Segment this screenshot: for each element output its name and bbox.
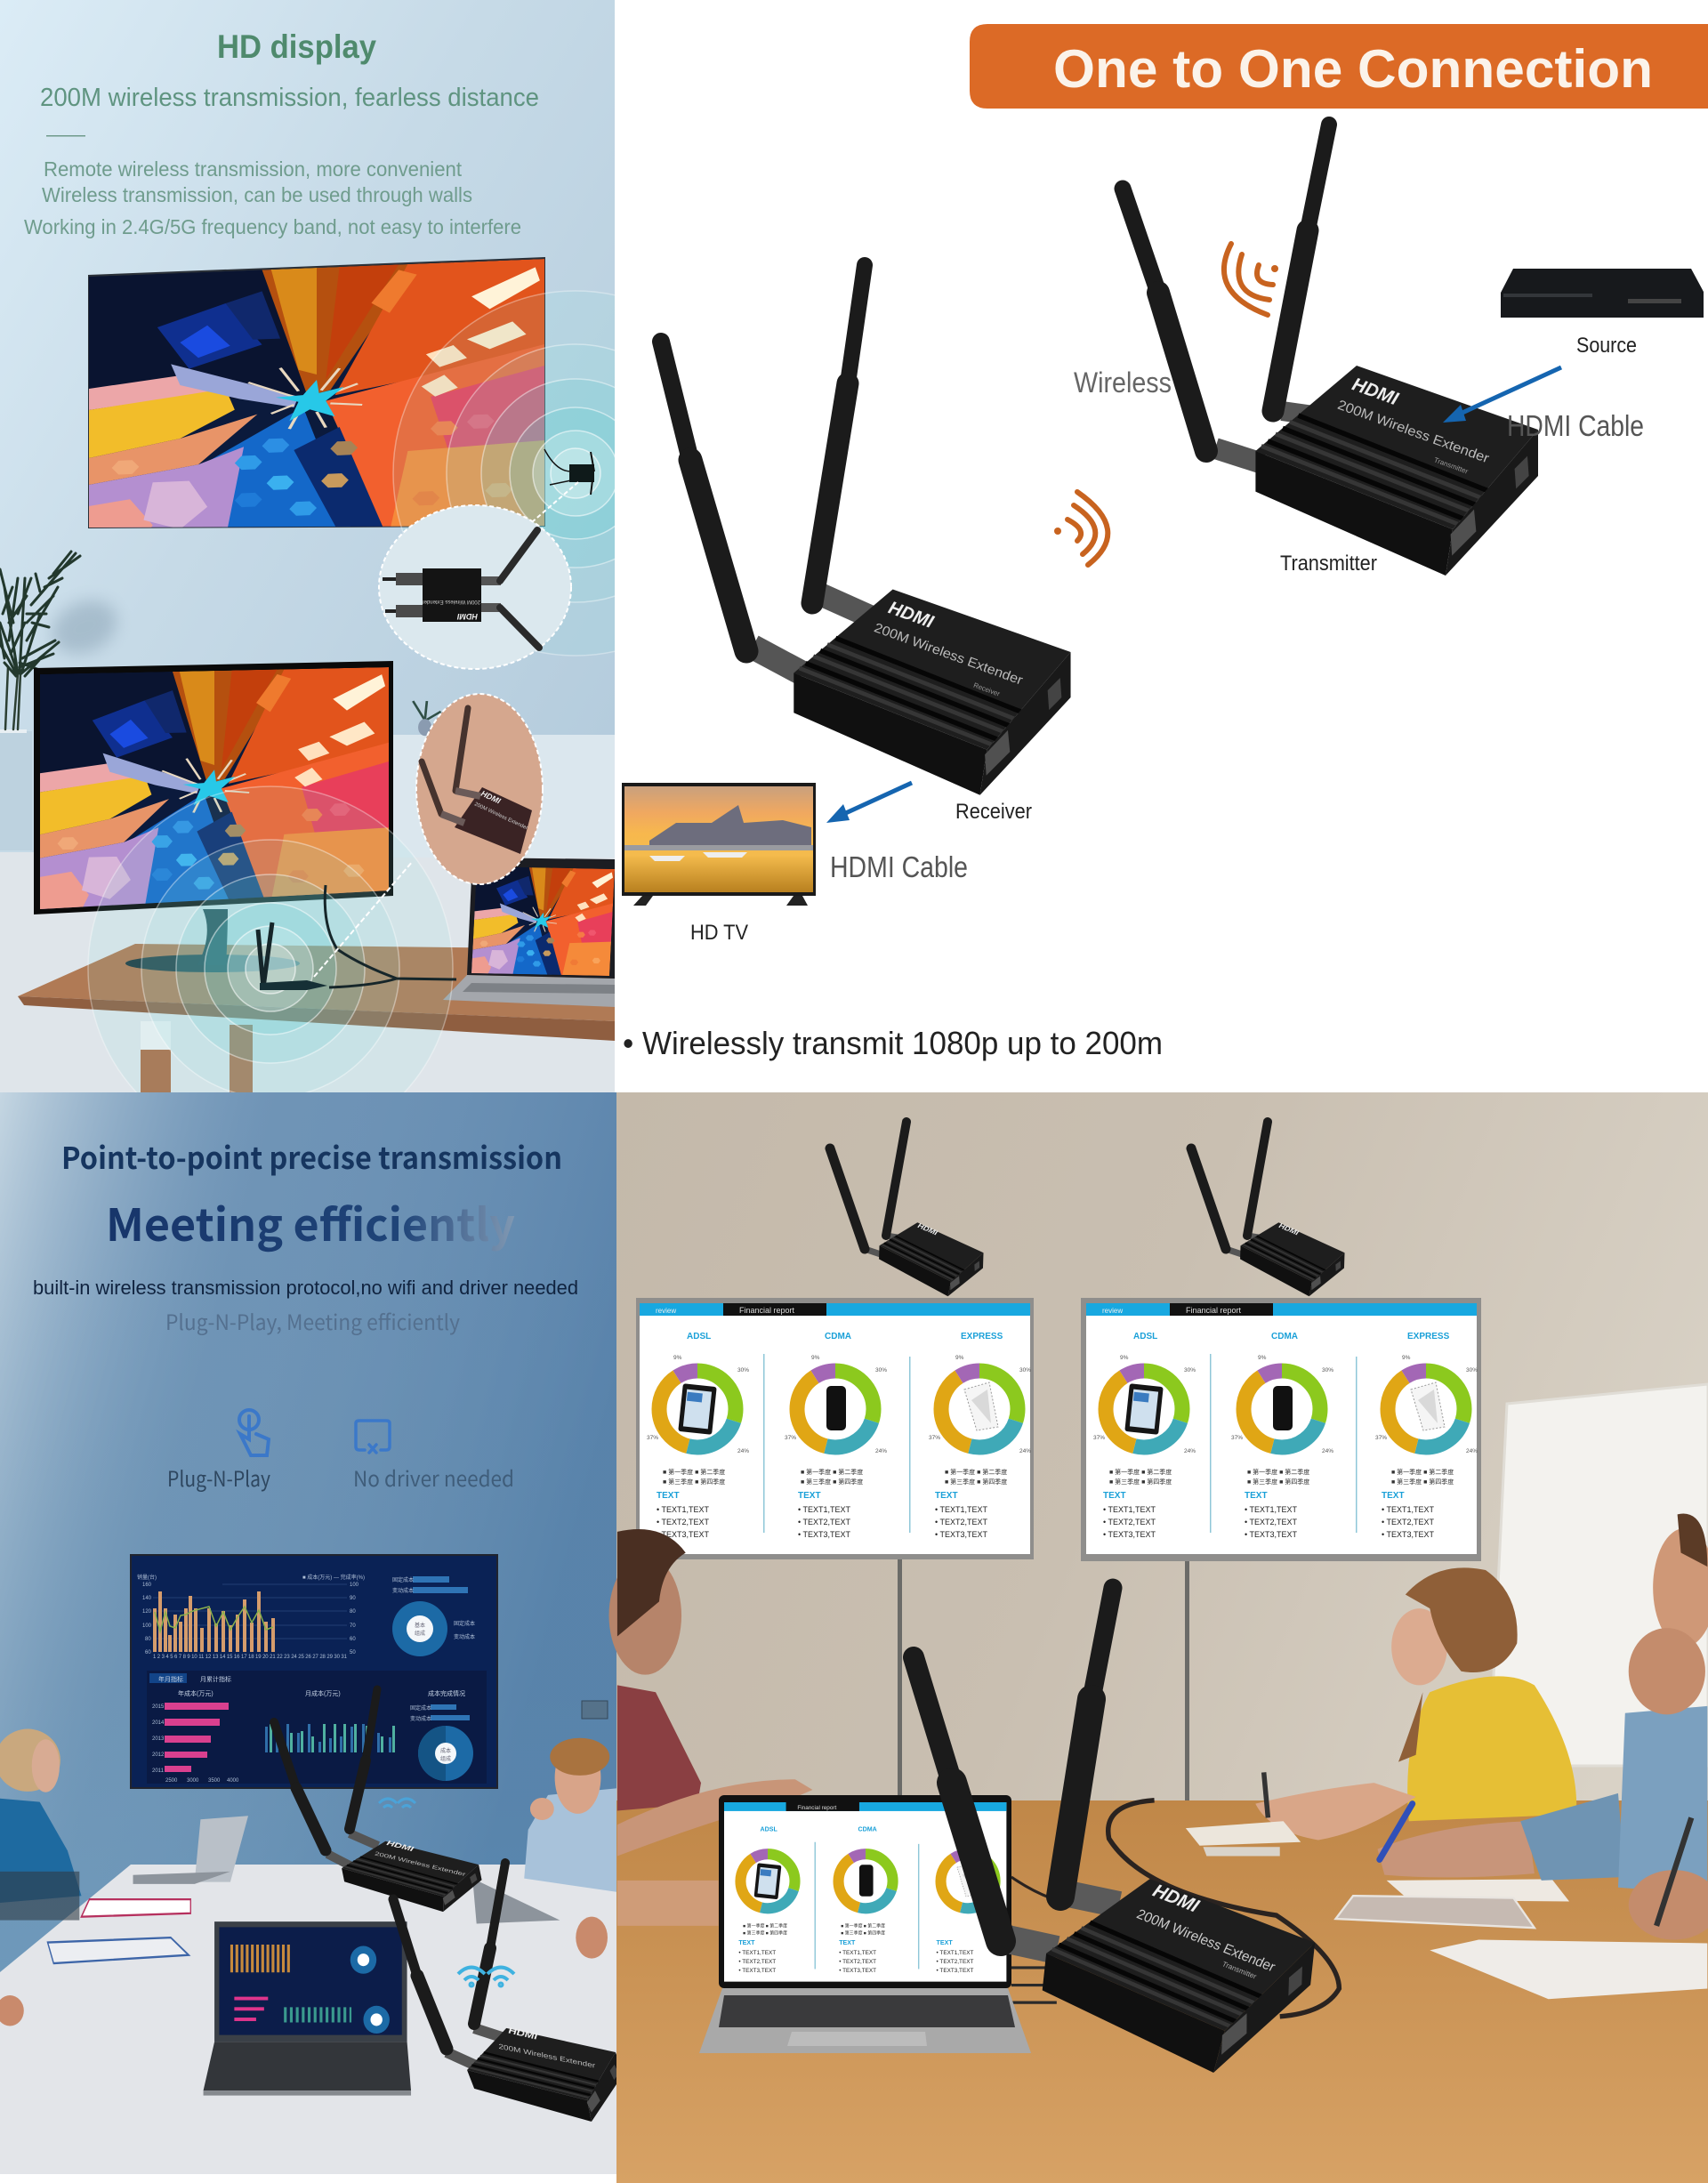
whiteboard bbox=[1489, 1384, 1708, 1766]
small transmitter and cables on table bbox=[258, 885, 456, 990]
signal rings at the desktop transmitter bbox=[87, 785, 454, 1092]
chart axis labels: 销量(台) bbox=[137, 1574, 157, 1581]
feature line 3: Working in 2.4G/5G frequency band, not easy to interfere bbox=[24, 215, 521, 238]
laptop bbox=[699, 1795, 1031, 2053]
wall monitor dashboard bbox=[131, 1555, 497, 1788]
pink bars bbox=[165, 1703, 229, 1772]
callout: receiver close-up: 200M Wireless Extender bbox=[423, 599, 480, 604]
clipboard pink bbox=[82, 1899, 190, 1917]
sub-tabs and chart titles: 月成本(万元) bbox=[305, 1689, 341, 1697]
legend bars bbox=[413, 1576, 470, 1720]
callout: transmitter close-up on wood: 200M Wireless Extender bbox=[473, 802, 528, 831]
wall monitor dashboard: 2012 bbox=[152, 1752, 165, 1758]
laptop slide: • TEXT3,TEXT bbox=[839, 1968, 876, 1974]
projected slide right: ■ 第一季度 ■ 第二季度 bbox=[1391, 1468, 1454, 1476]
projected slide left: EXPRESS bbox=[961, 1332, 1003, 1341]
transmitter device: Transmitter bbox=[1433, 455, 1470, 476]
projected slide left: ■ 第三季度 ■ 第四季度 bbox=[801, 1478, 863, 1486]
transmitter device: HDMI bbox=[1349, 374, 1402, 410]
chart axis labels: 100 bbox=[142, 1623, 152, 1629]
projected slide right: TEXT bbox=[1245, 1491, 1268, 1501]
receiver device: 200M Wireless Extender bbox=[872, 621, 1025, 689]
laptop slide: • TEXT3,TEXT bbox=[937, 1968, 973, 1974]
projected slide right: • TEXT1,TEXT bbox=[1245, 1505, 1297, 1514]
chart axis labels: 80 bbox=[350, 1609, 356, 1615]
laptop slide: ■ 第三季度 ■ 第四季度 bbox=[743, 1929, 787, 1936]
sub-tabs and chart titles: 成本完成情况 bbox=[428, 1689, 465, 1697]
chart axis labels: 80 bbox=[145, 1637, 151, 1642]
projected slide right: • TEXT1,TEXT bbox=[1382, 1505, 1434, 1514]
projected slide left: 37% bbox=[647, 1435, 658, 1441]
projected slide right: • TEXT2,TEXT bbox=[1245, 1518, 1297, 1526]
icon: small receiver on the wall bbox=[544, 449, 594, 495]
floor bbox=[0, 852, 615, 1092]
description: built-in wireless transmission protocol,no wifi and driver needed bbox=[33, 1277, 578, 1299]
icon: no driver bbox=[356, 1421, 390, 1453]
projected slide right: 24% bbox=[1322, 1448, 1333, 1454]
transmitter device: 200M Wireless Extender bbox=[1335, 398, 1491, 466]
wall dividers bbox=[898, 1559, 902, 1804]
plant and pot bbox=[0, 552, 80, 850]
white console behind the monitor bbox=[393, 735, 615, 858]
projected slide right: 9% bbox=[1120, 1355, 1129, 1361]
small device above right slide: HDMI bbox=[1277, 1221, 1301, 1237]
woman in yellow bbox=[1255, 1567, 1576, 1840]
papers and tablet bbox=[1186, 1821, 1707, 1999]
projected slide left: 37% bbox=[929, 1435, 940, 1441]
chart axis labels: 60 bbox=[350, 1637, 356, 1642]
projected slide right: TEXT bbox=[1382, 1491, 1405, 1501]
laptop slide: ADSL bbox=[760, 1826, 777, 1833]
wall monitor dashboard: 固定成本 bbox=[410, 1704, 431, 1712]
projected slide right: ■ 第一季度 ■ 第二季度 bbox=[1247, 1468, 1309, 1476]
projected slide left: 37% bbox=[785, 1435, 796, 1441]
label: plug and play: Plug-N-Play bbox=[167, 1462, 270, 1493]
projected slide left: • TEXT3,TEXT bbox=[798, 1530, 850, 1539]
label: wireless: Wireless bbox=[1074, 367, 1172, 399]
projected slide right bbox=[1081, 1298, 1481, 1561]
projected slide right: • TEXT2,TEXT bbox=[1382, 1518, 1434, 1526]
lower device: HDMI bbox=[508, 2026, 538, 2042]
projected slide left: TEXT bbox=[657, 1491, 680, 1501]
wall monitor dashboard: 4000 bbox=[227, 1778, 239, 1784]
projected slide left: 30% bbox=[875, 1367, 887, 1373]
wall monitor dashboard: 3000 bbox=[187, 1778, 199, 1784]
projected slide right: • TEXT3,TEXT bbox=[1103, 1530, 1156, 1539]
chart axis labels: 120 bbox=[142, 1609, 152, 1615]
projected slide right: 24% bbox=[1184, 1448, 1196, 1454]
wall monitor dashboard: 2014 bbox=[152, 1720, 165, 1726]
projected slide right: 9% bbox=[1258, 1355, 1267, 1361]
projected slide right: ■ 第三季度 ■ 第四季度 bbox=[1247, 1478, 1309, 1486]
laptop slide: Financial report bbox=[797, 1805, 837, 1811]
projected slide right: ■ 第三季度 ■ 第四季度 bbox=[1391, 1478, 1454, 1486]
laptop slide: ■ 第三季度 ■ 第四季度 bbox=[841, 1929, 885, 1936]
projected slide left: • TEXT1,TEXT bbox=[657, 1505, 709, 1514]
donut bottom bbox=[418, 1726, 473, 1781]
receiver device: HDMI bbox=[886, 598, 937, 632]
icon: upper wireless signal bbox=[1224, 244, 1278, 315]
chart axis labels bbox=[137, 1574, 365, 1660]
chart axis labels: 90 bbox=[350, 1596, 356, 1601]
projected slide left: 24% bbox=[875, 1448, 887, 1454]
wall monitor dashboard: 变动成本 bbox=[392, 1587, 414, 1594]
projected slide left: • TEXT2,TEXT bbox=[657, 1518, 709, 1526]
wall switch bbox=[582, 1701, 608, 1719]
main device in front of laptop: HDMI bbox=[1149, 1881, 1203, 1917]
chart axis labels: 100 bbox=[350, 1583, 359, 1588]
projected slide right: CDMA bbox=[1271, 1332, 1298, 1341]
right laptop bbox=[472, 1879, 560, 1923]
projected slide left: Financial report bbox=[739, 1306, 795, 1315]
upper device: HDMI bbox=[385, 1840, 415, 1854]
teal bars bbox=[270, 1724, 395, 1752]
wall monitor dashboard: 2013 bbox=[152, 1736, 165, 1742]
projected slide left: 9% bbox=[955, 1355, 964, 1361]
man on the right bbox=[524, 1738, 619, 1892]
feature line 2: Wireless transmission, can be used through walls bbox=[42, 183, 472, 206]
small device above left slide: HDMI bbox=[916, 1221, 939, 1237]
main device in front of laptop bbox=[914, 1588, 1321, 2075]
wall monitor dashboard: 2011 bbox=[152, 1768, 165, 1774]
chart axis labels: 70 bbox=[350, 1623, 356, 1629]
chart axis labels: 60 bbox=[145, 1650, 151, 1655]
laptop slide bbox=[724, 1802, 1006, 1982]
feature line 1: Remote wireless transmission, more convenient bbox=[44, 157, 463, 181]
title banner bbox=[970, 24, 1708, 109]
callout: transmitter close-up on wood: HDMI bbox=[479, 789, 503, 806]
projected slide right: Financial report bbox=[1186, 1306, 1242, 1315]
projected slide left: ADSL bbox=[687, 1332, 711, 1341]
projected slide left: TEXT bbox=[935, 1491, 958, 1501]
projected slide left: CDMA bbox=[825, 1332, 851, 1341]
clipboard blue bbox=[48, 1937, 189, 1963]
projected slide right: review bbox=[1102, 1307, 1123, 1315]
signal rings at the wall receiver bbox=[392, 290, 615, 657]
laptop slide: • TEXT3,TEXT bbox=[738, 1968, 776, 1974]
small device above left slide bbox=[830, 1122, 984, 1301]
icon: HD TV bbox=[622, 783, 816, 906]
icon: plug and play hand bbox=[239, 1410, 269, 1455]
projected slide left: • TEXT1,TEXT bbox=[798, 1505, 850, 1514]
label: HDMI cable lower: HDMI Cable bbox=[830, 850, 968, 883]
laptop slide: ■ 第一季度 ■ 第二季度 bbox=[841, 1923, 885, 1929]
monitor bbox=[34, 661, 393, 972]
wall monitor dashboard: 3500 bbox=[208, 1778, 221, 1784]
projected slide left: • TEXT1,TEXT bbox=[935, 1505, 987, 1514]
panel: conference room photo bbox=[609, 1092, 1708, 2183]
donut bottom: 组成 bbox=[440, 1755, 451, 1762]
icon: small wifi signals bbox=[379, 1799, 415, 1808]
chart axis labels: 140 bbox=[142, 1596, 152, 1601]
callout: transmitter close-up on wood bbox=[416, 694, 543, 884]
laptop behind bbox=[195, 1816, 248, 1882]
projected slide left: TEXT bbox=[798, 1491, 821, 1501]
bar chart bbox=[153, 1591, 275, 1652]
arrow: source HDMI cable bbox=[1443, 367, 1561, 423]
small potted plant bbox=[413, 701, 441, 736]
projected slide left: 24% bbox=[737, 1448, 749, 1454]
label: HD TV: HD TV bbox=[690, 921, 748, 945]
label: no driver needed: No driver needed bbox=[353, 1462, 514, 1493]
projected slide left: • TEXT2,TEXT bbox=[935, 1518, 987, 1526]
laptop slide: • TEXT1,TEXT bbox=[839, 1950, 876, 1956]
laptop slide: • TEXT2,TEXT bbox=[738, 1959, 776, 1965]
projected slide left bbox=[636, 1298, 1034, 1559]
projected slide right: ADSL bbox=[1133, 1332, 1157, 1341]
arrow: TV HDMI cable bbox=[826, 783, 912, 823]
sub-tabs and chart titles: 年成本(万元) bbox=[178, 1689, 214, 1697]
projected slide right: 30% bbox=[1466, 1367, 1478, 1373]
donut bottom: 成本 bbox=[440, 1747, 451, 1754]
projected slide right: • TEXT2,TEXT bbox=[1103, 1518, 1156, 1526]
wall monitor dashboard: 固定成本 bbox=[392, 1576, 414, 1583]
icon: large wifi signals bbox=[458, 1968, 514, 1986]
projected slide right: 30% bbox=[1184, 1367, 1196, 1373]
chart axis labels: 1 2 3 4 5 6 7 8 9 10 11 12 13 14 15 16 17 18 19 20 21 22 23 24 25 26 27 28 29 30 31 bbox=[153, 1655, 348, 1660]
transmitter device bbox=[1123, 125, 1538, 576]
laptop slide: TEXT bbox=[738, 1939, 755, 1946]
projected slide right: • TEXT3,TEXT bbox=[1382, 1530, 1434, 1539]
woman on the left bbox=[0, 1729, 82, 1903]
projected slide left: • TEXT3,TEXT bbox=[935, 1530, 987, 1539]
laptop slide: ■ 第一季度 ■ 第二季度 bbox=[743, 1923, 787, 1929]
wall-mounted TV bbox=[88, 257, 545, 544]
title banner: One to One Connection bbox=[1053, 39, 1653, 99]
chart axis labels: 160 bbox=[142, 1583, 152, 1588]
laptop slide: • TEXT2,TEXT bbox=[839, 1959, 876, 1965]
panel: HD display bbox=[0, 0, 615, 1092]
chart axis labels: 50 bbox=[350, 1650, 356, 1655]
laptop slide: • TEXT1,TEXT bbox=[937, 1950, 973, 1956]
projected slide left: 9% bbox=[811, 1355, 820, 1361]
projected slide left: 24% bbox=[1019, 1448, 1031, 1454]
projected slide right: 9% bbox=[1402, 1355, 1411, 1361]
donut top: 基本 bbox=[415, 1622, 425, 1629]
table edge cables bbox=[1011, 1968, 1057, 2002]
projected slide right: 37% bbox=[1093, 1435, 1105, 1441]
upper device bbox=[274, 1689, 488, 1913]
projected slide right: ■ 第三季度 ■ 第四季度 bbox=[1109, 1478, 1172, 1486]
people, notebooks and cable bbox=[609, 1513, 1708, 2017]
lower device: 200M Wireless Extender bbox=[498, 2042, 595, 2069]
icon: source box bbox=[1501, 269, 1704, 318]
projected slide right: EXPRESS bbox=[1407, 1332, 1450, 1341]
projected slide right: 37% bbox=[1375, 1435, 1387, 1441]
pen in hand bbox=[1264, 1772, 1268, 1817]
projected slide left: ■ 第一季度 ■ 第二季度 bbox=[801, 1468, 863, 1476]
projected slide right: TEXT bbox=[1103, 1491, 1126, 1501]
projected slide left: ■ 第三季度 ■ 第四季度 bbox=[663, 1478, 725, 1486]
projected slide left: ■ 第三季度 ■ 第四季度 bbox=[945, 1478, 1007, 1486]
laptop slide: TEXT bbox=[839, 1939, 856, 1946]
main device in front of laptop: Transmitter bbox=[1221, 1960, 1258, 1981]
sub-tabs and chart titles bbox=[149, 1673, 465, 1697]
right hands bbox=[0, 1917, 608, 2026]
laptop slide: TEXT bbox=[937, 1939, 953, 1946]
projected slide left: • TEXT3,TEXT bbox=[657, 1530, 709, 1539]
wall monitor dashboard: 2500 bbox=[165, 1778, 178, 1784]
small device above right slide bbox=[1191, 1122, 1345, 1301]
wall monitor dashboard: 2015 bbox=[152, 1704, 165, 1710]
heading: meeting efficiently: Meeting efficiently bbox=[106, 1190, 515, 1254]
laptop slide: • TEXT2,TEXT bbox=[937, 1959, 973, 1965]
conference table bbox=[0, 1865, 616, 2174]
projected slide left: • TEXT2,TEXT bbox=[798, 1518, 850, 1526]
subtitle: Plug-N-Play, Meeting efficiently bbox=[165, 1305, 460, 1336]
label: source: Source bbox=[1576, 334, 1637, 358]
plant shadow bbox=[48, 596, 121, 658]
subheading: 200M wireless transmission, fearless distance bbox=[40, 84, 539, 112]
icon: lower wireless signal bbox=[1054, 492, 1108, 565]
blue pen bbox=[1380, 1804, 1413, 1859]
projected slide left: ■ 第一季度 ■ 第二季度 bbox=[945, 1468, 1007, 1476]
heading: point-to-point: Point-to-point precise transmission bbox=[61, 1134, 562, 1178]
callout: receiver close-up bbox=[379, 505, 571, 669]
wall monitor dashboard: 变动成本 bbox=[410, 1715, 431, 1722]
projected slide right: 24% bbox=[1466, 1448, 1478, 1454]
sub-tabs and chart titles: 年月指标 bbox=[158, 1675, 183, 1683]
main device in front of laptop: 200M Wireless Extender bbox=[1134, 1907, 1277, 1975]
table bbox=[18, 944, 615, 1093]
projected slide right: ■ 第一季度 ■ 第二季度 bbox=[1109, 1468, 1172, 1476]
label: HDMI cable upper: HDMI Cable bbox=[1507, 409, 1644, 442]
receiver device bbox=[661, 265, 1071, 795]
people and laptops at table bbox=[0, 1729, 619, 2096]
chart axis labels: ■ 成本(万元) — 完成率(%) bbox=[302, 1574, 365, 1581]
wall monitor dashboard: 变动成本 bbox=[454, 1633, 475, 1640]
donut top: 组成 bbox=[415, 1630, 425, 1637]
panel: Meeting efficiently bbox=[0, 1092, 641, 2183]
lower device bbox=[393, 1863, 641, 2127]
projected slide left: 9% bbox=[673, 1355, 682, 1361]
projected slide left: ■ 第一季度 ■ 第二季度 bbox=[663, 1468, 725, 1476]
laptop slide: • TEXT1,TEXT bbox=[738, 1950, 776, 1956]
receiver device: Receiver bbox=[972, 681, 1002, 698]
projected slide right: 37% bbox=[1231, 1435, 1243, 1441]
projected slide right: • TEXT3,TEXT bbox=[1245, 1530, 1297, 1539]
bullet: wireless transmission range: • Wirelessly transmit 1080p up to 200m bbox=[623, 1025, 1163, 1061]
projected slide left: 30% bbox=[737, 1367, 749, 1373]
front laptop bbox=[204, 1921, 411, 2096]
label: receiver: Receiver bbox=[955, 800, 1032, 824]
projected slide left: review bbox=[656, 1307, 676, 1315]
sub-tabs and chart titles: 月累计指标 bbox=[200, 1675, 231, 1683]
projected slide right: 30% bbox=[1322, 1367, 1333, 1373]
table bbox=[616, 1800, 1708, 2183]
laptop on table bbox=[443, 858, 615, 1007]
chart grid lines bbox=[153, 1584, 347, 1639]
upper device: 200M Wireless Extender bbox=[374, 1850, 466, 1878]
wall monitor dashboard: 固定成本 bbox=[454, 1620, 475, 1627]
callout: receiver close-up: HDMI bbox=[457, 612, 478, 621]
heading: HD display: HD display bbox=[217, 28, 376, 65]
projected slide left: 30% bbox=[1019, 1367, 1031, 1373]
label: transmitter: Transmitter bbox=[1280, 552, 1377, 576]
panel: One to One Connection bbox=[615, 0, 1708, 1092]
man on the right bbox=[1377, 1513, 1708, 1940]
device cable bbox=[1108, 1800, 1339, 2017]
donut top bbox=[392, 1601, 447, 1656]
man on the left bbox=[609, 1529, 812, 1926]
projected slide right: • TEXT1,TEXT bbox=[1103, 1505, 1156, 1514]
laptop slide: CDMA bbox=[858, 1826, 877, 1833]
